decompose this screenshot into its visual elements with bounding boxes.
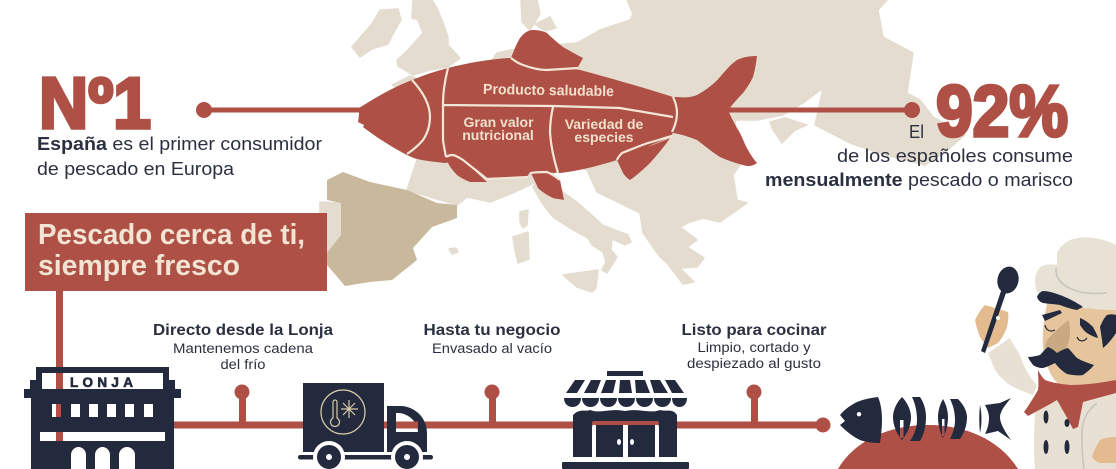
fish label: producto saludable: Producto saludable [483,82,614,100]
chef arm sleeve [988,338,1037,395]
connector: left line and dot [196,102,364,118]
icon: cut fish [840,397,1011,443]
icon: lonja building [24,367,181,469]
chef neckerchief [1024,370,1116,429]
step 3 text: despiezado al gusto [687,356,821,371]
step 2 text: Envasado al vacío [432,341,552,356]
stat text: monthly consumption: mensualmente pescado o marisco [765,169,1073,190]
step 3 text [682,322,826,371]
step 1 text [153,322,333,372]
step 1 text: Mantenemos cadena [173,341,314,356]
stat text: Spain first consumer [37,133,322,179]
stat text: Spain first consumer: de pescado en Europa [37,158,235,179]
icon: lonja building: LONJA [70,375,133,390]
fish label: variedad de especies [565,116,644,145]
stat: number one: Nº1 [39,64,151,144]
chef hand holding spoon [975,305,1008,348]
step 1 text: del frío [220,357,266,372]
step 3 text: Limpio, cortado y [698,340,811,355]
fish diagram [358,30,757,200]
step 2 text: Hasta tu negocio [424,322,561,339]
step 2 text [424,322,561,356]
illustration: chef [975,237,1116,469]
chef second hand [1092,437,1116,463]
fish fin: belly middle [531,172,564,200]
chef eyebrows [1042,310,1098,338]
map: Spain highlighted [327,172,457,286]
title box: Pescado cerca de ti, [38,219,305,251]
fish cut lines [407,58,677,180]
step 1 text: Directo desde la Lonja [153,322,333,339]
fish label: variedad de especies: especies [574,129,634,145]
fish label: gran valor nutricional: Gran valor [463,114,534,130]
chef closed eyes [1045,325,1087,341]
title box: siempre fresco [38,250,240,282]
red table [838,425,1018,469]
chef mustache [1028,347,1094,375]
chef jacket [1034,392,1116,469]
chef nose [1045,320,1070,356]
stat: 92 percent: 92% [936,72,1068,152]
stat text: monthly consumption [765,121,1073,190]
stat text: Spain first consumer: España es el primer consumidor [37,133,322,154]
stat text: monthly consumption: de los españoles consume [837,145,1073,166]
icon: fish shop [562,371,689,469]
stat text: monthly consumption: El [909,121,924,142]
fish fin: dorsal [511,30,583,70]
fish label: gran valor nutricional [462,114,534,143]
icon: spoon [981,265,1021,353]
title box [25,213,327,291]
chef hat [1035,237,1116,310]
step 3 text: Listo para cocinar [682,322,826,339]
connector: right line and dot [725,102,920,118]
chef face [1043,300,1116,392]
icon: refrigerated truck [298,383,433,469]
fish label: gran valor nutricional: nutricional [462,127,534,143]
map of Europe [320,0,965,292]
chef buttons [1044,410,1070,454]
fish fin: rear [617,138,670,180]
timeline [56,291,830,441]
chef hair [1037,291,1116,348]
fish fin: belly left [446,155,487,182]
fish label: variedad de especies: Variedad de [565,116,644,132]
